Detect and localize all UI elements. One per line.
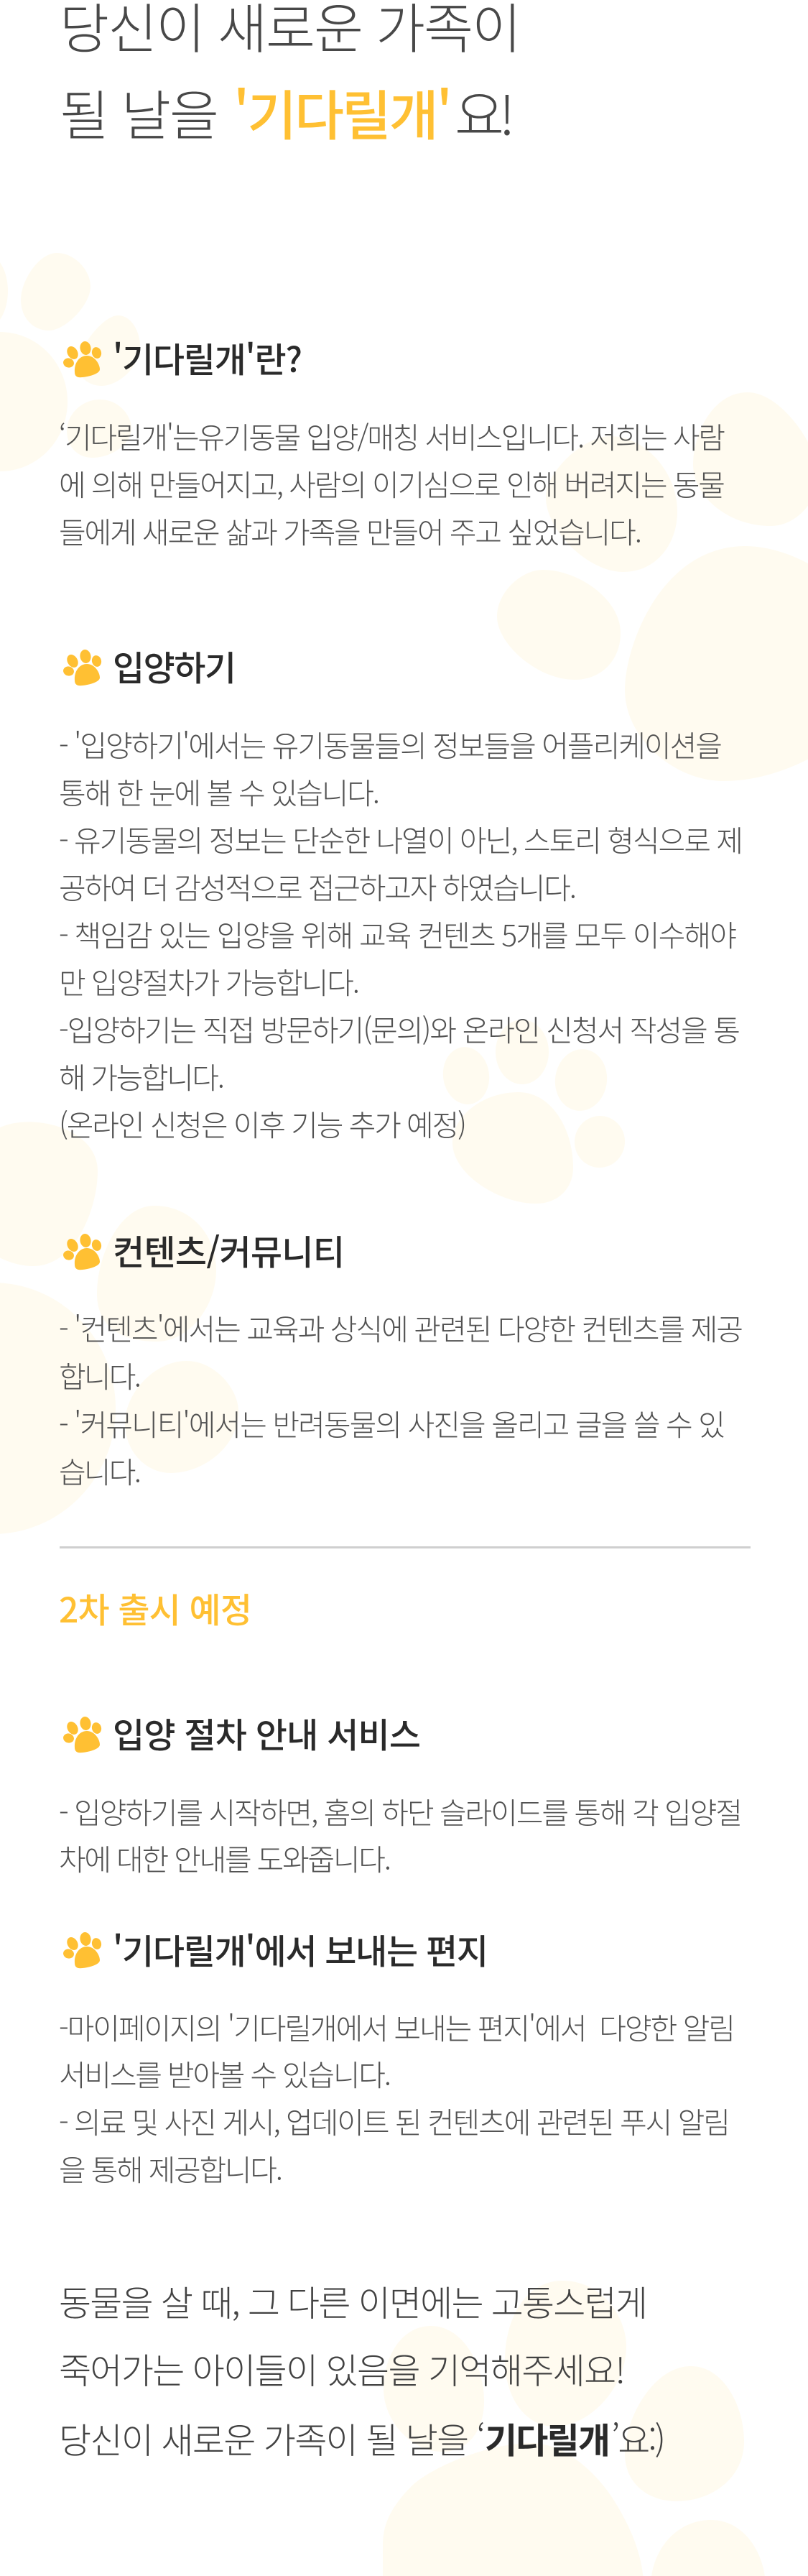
body text: adoption: 공하여 더 감성적으로 접근하고자 하였습니다. bbox=[59, 864, 577, 908]
section: letter bbox=[59, 1924, 735, 2189]
heading: adoption: 입양하기 bbox=[113, 640, 236, 691]
body text: about bbox=[59, 414, 725, 552]
heading: content and community: 컨텐츠/커뮤니티 bbox=[113, 1224, 345, 1275]
icon: paw bbox=[62, 341, 103, 377]
section: adoption guide bbox=[59, 1707, 743, 1879]
body text: adoption: 통해 한 눈에 볼 수 있습니다. bbox=[59, 770, 380, 813]
closing message: 동물을 살 때, 그 다른 이면에는 고통스럽게 bbox=[59, 2276, 648, 2327]
body text: adoption: - 유기동물의 정보는 단순한 나열이 아닌, 스토리 형식으로 제 bbox=[59, 817, 743, 860]
icon: paw bbox=[62, 1233, 103, 1270]
body text: adoption: - 책임감 있는 입양을 위해 교육 컨텐츠 5개를 모두 이수해야 bbox=[59, 912, 737, 955]
paw print: middle bbox=[440, 1020, 629, 1204]
body text: adoption bbox=[59, 722, 743, 1145]
body text: letter: -마이페이지의 '기다릴개에서 보내는 편지'에서 다양한 알림 bbox=[59, 2005, 735, 2048]
body text: letter: - 의료 및 사진 게시, 업데이트 된 컨텐츠에 관련된 푸시 알림 bbox=[59, 2099, 730, 2142]
section: adoption bbox=[59, 640, 743, 1145]
body text: content and community: - '커뮤니티'에서는 반려동물의 사진을 올리고 글을 쓸 수 있 bbox=[59, 1401, 725, 1444]
body text: letter bbox=[59, 2005, 735, 2189]
closing message bbox=[59, 2276, 666, 2464]
title: '기다릴개' bbox=[233, 73, 452, 151]
body text: content and community bbox=[59, 1306, 743, 1492]
title: 요! bbox=[455, 73, 515, 151]
body text: adoption: 만 입양절차가 가능합니다. bbox=[59, 959, 360, 1002]
heading: second release: 2차 출시 예정 bbox=[59, 1582, 252, 1633]
closing message: 죽어가는 아이들이 있음을 기억해주세요! bbox=[59, 2343, 626, 2394]
body text: adoption: 해 가능합니다. bbox=[59, 1054, 225, 1097]
divider bbox=[60, 1546, 751, 1548]
section: content and community bbox=[59, 1224, 743, 1492]
body text: letter: 서비스를 받아볼 수 있습니다. bbox=[59, 2051, 391, 2095]
body text: adoption: -입양하기는 직접 방문하기(문의)와 온라인 신청서 작성을 통 bbox=[59, 1007, 740, 1050]
paw print: bottom right bbox=[383, 2281, 766, 2576]
section: about bbox=[59, 332, 725, 552]
body text: about: ‘기다릴개'는유기동물 입양/매칭 서비스입니다. 저희는 사람 bbox=[59, 414, 725, 457]
body text: about: 들에게 새로운 삶과 가족을 만들어 주고 싶었습니다. bbox=[59, 509, 642, 552]
icon: paw bbox=[62, 1931, 103, 1968]
icon: paw bbox=[62, 1716, 103, 1753]
icon: paw bbox=[62, 649, 103, 685]
heading: about: '기다릴개'란? bbox=[113, 332, 302, 382]
body text: adoption: (온라인 신청은 이후 기능 추가 예정) bbox=[59, 1102, 467, 1145]
heading: adoption guide: 입양 절차 안내 서비스 bbox=[113, 1707, 421, 1758]
title bbox=[60, 0, 521, 151]
closing message: 당신이 새로운 가족이 될 날을 ‘ bbox=[59, 2413, 486, 2464]
title: 될 날을 bbox=[60, 73, 219, 151]
body text: adoption: - '입양하기'에서는 유기동물들의 정보들을 어플리케이션을 bbox=[59, 722, 723, 765]
body text: adoption guide: - 입양하기를 시작하면, 홈의 하단 슬라이드를 통해 각 입양절 bbox=[59, 1789, 743, 1832]
paw print: top left bbox=[0, 253, 140, 471]
heading: letter: '기다릴개'에서 보내는 편지 bbox=[113, 1924, 488, 1974]
body text: adoption guide bbox=[59, 1789, 743, 1879]
body text: content and community: 합니다. bbox=[59, 1353, 141, 1396]
body text: adoption guide: 차에 대한 안내를 도와줍니다. bbox=[59, 1836, 391, 1879]
closing message: ’요:) bbox=[611, 2413, 666, 2464]
body text: content and community: - '컨텐츠'에서는 교육과 상식에 관련된 다양한 컨텐츠를 제공 bbox=[59, 1306, 743, 1349]
closing message: 기다릴개 bbox=[485, 2413, 610, 2464]
body text: letter: 을 통해 제공합니다. bbox=[59, 2146, 283, 2189]
paw print: left lower bbox=[0, 1122, 238, 1534]
body text: content and community: 습니다. bbox=[59, 1449, 141, 1492]
body text: about: 에 의해 만들어지고, 사람의 이기심으로 인해 버려지는 동물 bbox=[59, 461, 725, 504]
paw print: right bbox=[497, 392, 808, 781]
